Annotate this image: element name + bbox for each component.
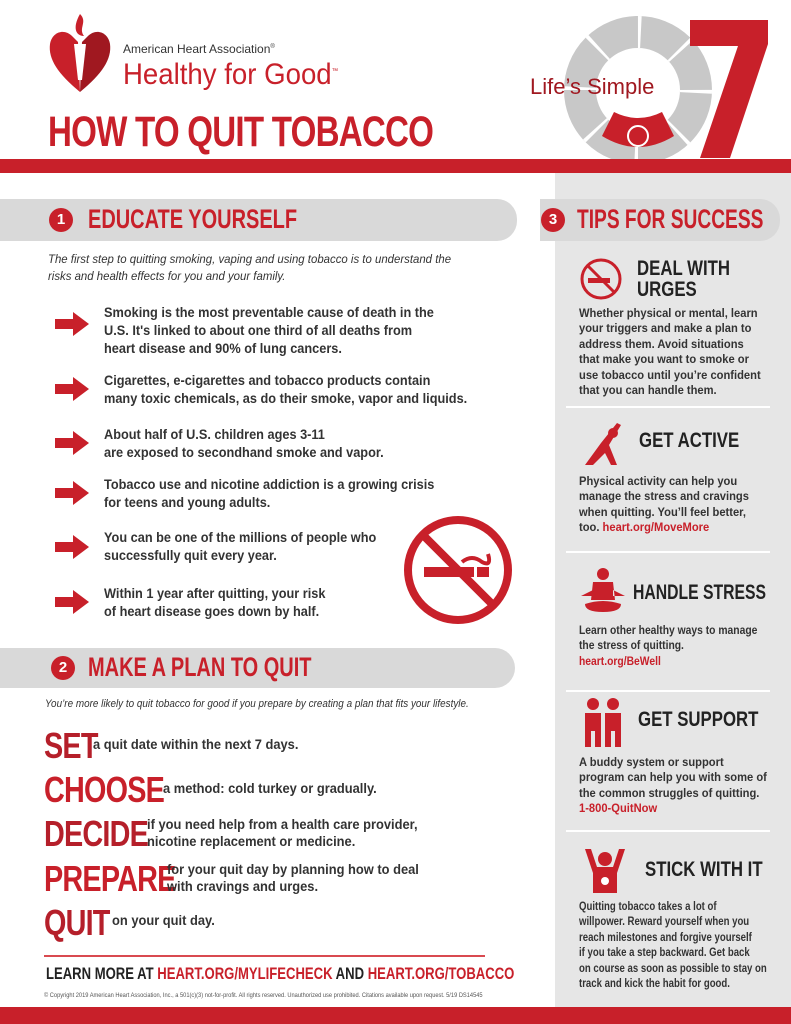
plan steps: if you need help from a health care provider, (147, 816, 418, 832)
tip: stick with it: track and kick the habit for good. (579, 976, 730, 990)
tip: deal with urges: use tobacco until you’re confident (579, 368, 761, 382)
plan steps: nicotine replacement or medicine. (147, 833, 355, 849)
tip: get active (579, 423, 749, 534)
tip: stick with it: STICK WITH IT (645, 858, 763, 881)
bullets: Smoking is the most preventable cause of death in the (104, 304, 434, 320)
tip: handle stress: the stress of quitting. (579, 638, 684, 652)
section 3 header: 3 (549, 211, 557, 228)
tip: deal with urges: that make you want to smoke or (579, 352, 749, 366)
bullets: heart disease and 90% of lung cancers. (104, 340, 342, 356)
tip: deal with urges: address them. Avoid situations (579, 337, 744, 351)
tip: deal with urges: Whether physical or mental, learn (579, 306, 758, 320)
logo text: American Heart Association® (123, 42, 275, 56)
bullets: of heart disease goes down by half. (104, 603, 319, 619)
plan steps: a method: cold turkey or gradually. (163, 780, 377, 796)
bullets: Cigarettes, e-cigarettes and tobacco products contain (104, 372, 430, 388)
plan steps: a quit date within the next 7 days. (93, 736, 298, 752)
section 1 intro: The first step to quitting smoking, vaping and using tobacco is to understand the (48, 252, 451, 266)
plan steps: with cravings and urges. (167, 878, 318, 894)
tip: handle stress: HANDLE STRESS (633, 581, 766, 604)
logo text (123, 42, 338, 91)
tip: stick with it: reach milestones and forgive yourself (579, 930, 752, 944)
top red band (0, 159, 791, 173)
section 2 header (0, 648, 515, 688)
section 2 intro: You’re more likely to quit tobacco for good if you prepare by creating a plan that fits your lifestyle. (45, 698, 469, 710)
bullets: Tobacco use and nicotine addiction is a growing crisis (104, 476, 434, 492)
plan steps: for your quit day by planning how to deal (167, 861, 419, 877)
tip: get active: GET ACTIVE (639, 429, 739, 452)
bullets: many toxic chemicals, as do their smoke, vapor and liquids. (104, 390, 467, 406)
bottom red bar (0, 1007, 791, 1024)
life's simple 7 badge (530, 16, 768, 159)
tip: get support: the common struggles of quitting. (579, 786, 759, 800)
tip: deal with urges: DEAL WITH (637, 257, 730, 280)
plan steps: PREPARE (44, 858, 176, 899)
tip: handle stress: heart.org/BeWell (579, 654, 661, 668)
section 1 intro (48, 252, 451, 283)
logo: heart torch (50, 14, 110, 92)
section 1 header: EDUCATE YOURSELF (88, 204, 297, 234)
tip: handle stress: Learn other healthy ways to manage (579, 623, 757, 637)
bullets: are exposed to secondhand smoke and vapor. (104, 444, 384, 460)
logo text: Healthy for Good™ (123, 58, 338, 91)
section 3 header: TIPS FOR SUCCESS (577, 204, 763, 234)
title: HOW TO QUIT TOBACCO (48, 108, 433, 156)
tip: stick with it: Quitting tobacco takes a lot of (579, 899, 717, 913)
tip: stick with it (579, 849, 767, 990)
tip: stick with it: willpower. Reward yourself when you (579, 914, 749, 928)
plan steps: SET (44, 725, 98, 766)
tip: get support: A buddy system or support (579, 755, 724, 769)
tip: deal with urges: that you can handle them. (579, 383, 717, 397)
plan steps: on your quit day. (112, 912, 215, 928)
section 1 header (0, 199, 517, 241)
tip: get support: program can help you with some of (579, 770, 767, 784)
section 3 header (540, 199, 780, 241)
copyright: © Copyright 2019 American Heart Association, Inc., a 501(c)(3) not-for-profit. All rights reserved. Unauthorized use prohibited. Citations available upon request. 5/19 DS14545 (44, 993, 483, 999)
tip: get support: 1-800-QuitNow (579, 801, 657, 815)
tip: get active: when quitting. You’ll feel better, (579, 505, 746, 519)
life's simple 7 badge: Life’s Simple (530, 74, 654, 99)
bullets: successfully quit every year. (104, 547, 277, 563)
tip: deal with urges: URGES (637, 278, 697, 301)
tip: get active: Physical activity can help you (579, 474, 737, 488)
plan steps: DECIDE (44, 813, 148, 854)
tip: handle stress (579, 568, 766, 668)
tip: get active: too. heart.org/MoveMore (579, 520, 709, 534)
plan steps: CHOOSE (44, 769, 164, 810)
tip: get support: GET SUPPORT (638, 708, 758, 731)
tip: stick with it: if you take a step backward. Get back (579, 945, 750, 959)
bullets: You can be one of the millions of people who (104, 529, 376, 545)
section 1 intro: risks and health effects for you and your family. (48, 269, 285, 283)
plan steps: QUIT (44, 902, 110, 943)
icon: no smoking (404, 516, 512, 624)
bullets: About half of U.S. children ages 3-11 (104, 426, 325, 442)
tip: deal with urges (579, 257, 761, 397)
tip: get active: manage the stress and cravings (579, 489, 749, 503)
footer links: LEARN MORE AT HEART.ORG/MYLIFECHECK AND HEART.ORG/TOBACCO (46, 964, 514, 983)
tip: stick with it: on course as soon as possible to stay on (579, 961, 767, 975)
bullets: U.S. It's linked to about one third of all deaths from (104, 322, 412, 338)
plan steps (44, 725, 419, 943)
bullets: for teens and young adults. (104, 494, 270, 510)
bullets: Within 1 year after quitting, your risk (104, 585, 325, 601)
tip: get support (579, 698, 767, 815)
tip: deal with urges: your triggers and make a plan to (579, 321, 751, 335)
bullets (55, 304, 467, 619)
section 2 header: 2 (59, 659, 67, 676)
right gray column (555, 173, 791, 1007)
section 2 header: MAKE A PLAN TO QUIT (88, 652, 311, 682)
section 1 header: 1 (57, 211, 65, 228)
